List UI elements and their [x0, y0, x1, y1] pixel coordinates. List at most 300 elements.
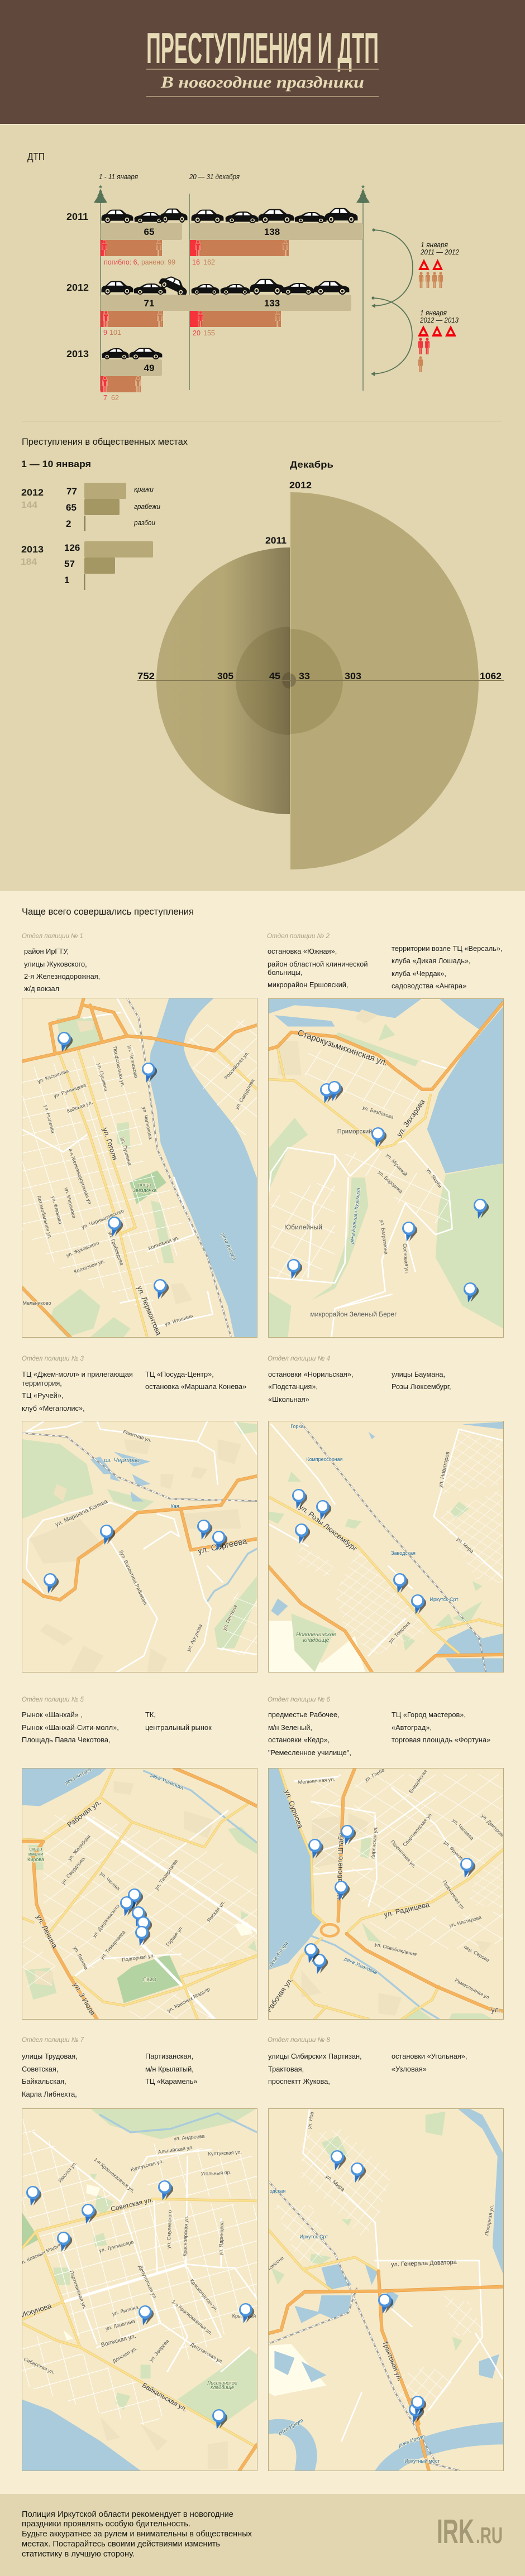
dept 8 places, column 2: «Узловая» — [392, 2065, 427, 2073]
totals 2012: 2012 — [21, 487, 44, 498]
map 4 labels: ул. Мира — [456, 1536, 475, 1554]
dept 8 places, column 1: улицы Сибирских Партизан, — [268, 2052, 362, 2060]
accident counts: 133 — [264, 298, 280, 309]
accident counts: 138 — [264, 227, 280, 237]
arrow: 2011 to 2012 — [371, 228, 413, 308]
axis values: 45 — [269, 671, 280, 681]
map 7 labels: ул. Красных Мадьяр — [18, 2241, 64, 2266]
map 5 labels: ул. Тимирязева — [154, 1858, 179, 1891]
map 3 border — [22, 1421, 257, 1672]
map 6 — [265, 1767, 506, 2019]
dept 2 places, column 2 — [392, 944, 503, 990]
map 1 labels: Кайская ул. — [66, 1099, 93, 1114]
map 1 labels: ул. Пушкина — [120, 1137, 132, 1166]
panel: police dept 2 — [267, 932, 504, 1337]
dept 6 places, column 1: предместье Рабочее, — [268, 1710, 340, 1719]
period heading: 1 — 10 января — [21, 459, 91, 469]
panel: police dept 5 — [22, 1695, 257, 2019]
values 2012: 77 — [66, 486, 77, 497]
map 4 labels: Иркутск-Срт — [430, 1597, 458, 1602]
dept 4 places, column 2: улицы Баумана, — [392, 1370, 445, 1378]
map 8 labels: река Иркут — [277, 2417, 304, 2436]
map 2 labels: река Большая Кузьмиха — [349, 1188, 361, 1244]
dept 6 places, column 2 — [392, 1710, 490, 1744]
heading: Декабрь: Декабрь — [290, 459, 333, 470]
dept 7 places, column 2: Партизанская, — [145, 2052, 193, 2060]
map 7 labels: Байкальская ул. — [141, 2381, 189, 2413]
map 1 labels: ул. Касьянова — [37, 1068, 69, 1084]
person icons on bars — [102, 240, 288, 392]
map 6 border — [268, 1768, 504, 2019]
axis values: 305 — [217, 671, 233, 681]
map 5 labels: ул. Дзержинского — [91, 1903, 121, 1939]
dept 3 places, column 1: ТЦ «Ручей», — [22, 1391, 64, 1400]
totals 2012: 144 — [21, 499, 38, 510]
map 5 labels: ул. 3 Июля — [71, 1981, 97, 2017]
map 1 labels: Колхозная ул. — [73, 1258, 106, 1275]
map 8 labels — [266, 2111, 495, 2464]
dept 2 places, column 2: садоводства «Ангара» — [392, 982, 466, 990]
crime type labels: разбои — [133, 519, 155, 527]
year labels: 2011 — [66, 211, 88, 222]
totals 2013 — [21, 544, 44, 567]
map 7 labels: Советская ул. — [110, 2196, 154, 2213]
dept 1 places: ж/д вокзал — [24, 984, 59, 993]
dept 2 places, column 1: больницы, — [268, 968, 303, 977]
road accident chart — [66, 173, 459, 402]
map 7 labels: Крылатый — [232, 2313, 256, 2319]
map 1 labels: Профсоюзная ул. — [112, 1046, 126, 1088]
map 5 — [22, 1766, 257, 2019]
dept 6 places, column 2: ТЦ «Город мастеров», — [392, 1710, 466, 1719]
map 7 labels: Красноярская ул. — [182, 2215, 189, 2256]
dept 7 heading: Отдел полиции № 7 — [22, 2036, 84, 2044]
dept 2 places, column 1: остановка «Южная», — [268, 947, 337, 955]
crime type labels — [133, 486, 160, 527]
map 6 labels: река Ангара — [268, 1940, 289, 1968]
values 2013 — [64, 542, 80, 585]
dept 3 places, column 1: ТЦ «Джем-молл» и прилегающая — [22, 1370, 133, 1378]
accident counts — [144, 227, 280, 373]
bars 2013 — [84, 541, 153, 590]
map 6 labels: ул. Фрунзе — [443, 1839, 465, 1861]
map 8 labels: ул. Генерала Доватора — [391, 2259, 457, 2268]
dept 4 places, column 1: «Подстанция», — [268, 1382, 318, 1391]
dept 8 places, column 1 — [268, 2052, 362, 2085]
dept 5 places, column 1: Рынок «Шанхай» , — [22, 1710, 83, 1719]
cars 2011 — [102, 208, 357, 223]
timeline axes — [101, 194, 363, 391]
map 3 labels: ул. Аргунова — [186, 1623, 203, 1652]
map 6 labels: ул. Чапаева — [451, 1818, 475, 1841]
map 5 labels: река Ангара — [64, 1766, 92, 1786]
map 2 labels: Приморский — [337, 1128, 372, 1135]
map 2 labels: ул. Захарова — [395, 1097, 427, 1138]
dept 6 places, column 2: «Автоград», — [392, 1723, 432, 1732]
map 2 labels: ул. Багратиона — [379, 1219, 389, 1255]
left half 2011 — [156, 547, 290, 814]
header band — [0, 0, 525, 125]
cars 2013 — [102, 348, 162, 359]
dept 6 heading: Отдел полиции № 6 — [268, 1695, 330, 1703]
map 7 labels: Донская ул. — [112, 2346, 138, 2364]
map 5 labels: Рабочая ул. — [65, 1798, 102, 1829]
dept 3 places, column 2: ТЦ «Посуда-Центр», — [145, 1370, 214, 1378]
map 7 labels: 1-я Красноказачья ул. — [171, 2299, 213, 2336]
totals 2013: 184 — [21, 556, 37, 567]
dept 4 places, column 2 — [392, 1370, 451, 1391]
panel: police dept 3 — [22, 1354, 257, 1672]
icon: right fir tree — [356, 185, 370, 203]
side note 2012-2013: 2012 — 2013 — [419, 316, 459, 324]
map 7 labels: Култукская ул. — [208, 2149, 242, 2157]
dept 3 places, column 1: территория, — [22, 1379, 62, 1387]
footer text — [22, 2510, 252, 2559]
accident counts: 71 — [144, 298, 154, 309]
map 1 — [22, 998, 257, 1337]
map 7 — [18, 2108, 258, 2471]
map 6 labels: ул. Освобождения — [374, 1941, 417, 1957]
dept 6 places, column 1: "Ремесленное училище", — [268, 1748, 351, 1757]
map 5 labels: имени — [28, 1851, 43, 1857]
accident count bars — [101, 223, 363, 376]
side note 2012-2013 — [418, 309, 459, 372]
subtitle rule — [146, 96, 379, 97]
map 6 labels: ул. Рабочего Штаба — [335, 1832, 345, 1899]
totals 2012 — [21, 487, 44, 510]
map 7 labels: Сибирская ул. — [23, 2356, 55, 2375]
map 6 labels: ул. Нестерова — [448, 1915, 482, 1929]
panel: police dept 8 — [266, 2036, 504, 2471]
dept 4 places, column 1 — [268, 1370, 354, 1404]
year labels: 2011 — [265, 535, 287, 546]
axis values: 33 — [299, 671, 310, 681]
map 7 labels: 1-я Красноказачья ул. — [93, 2156, 136, 2194]
heading: ДТП: ДТП — [27, 151, 45, 162]
map 8 labels: ул. Нов — [306, 2111, 315, 2130]
dept 3 places, column 1 — [22, 1370, 133, 1412]
map 4 labels: кладбище — [303, 1637, 330, 1643]
map 3 labels: ул. Маршала Конева — [54, 1498, 108, 1528]
map 6 labels: ул. Сурнова — [283, 1789, 305, 1830]
map 1 labels: ул. Свердлова — [234, 1078, 256, 1110]
crime type labels: кражи — [134, 486, 154, 493]
casualty numbers: 16 — [192, 258, 200, 266]
map 7 labels: ул. Лытюна — [112, 2304, 139, 2317]
dept 1 places: улицы Жуковского, — [24, 960, 87, 968]
map 6 labels: ул. — [491, 2006, 501, 2014]
dept 2 places, column 2: территории возле ТЦ «Версаль», — [392, 944, 503, 953]
map 8 labels: Трактовая ул. — [381, 2340, 404, 2382]
year labels — [265, 480, 312, 546]
map 7 labels: ул. Ядринцева — [218, 2221, 225, 2256]
map 4 pins — [292, 1489, 426, 1614]
dept 2 places, column 2: клуба «Чердак», — [392, 969, 446, 978]
values 2013: 126 — [64, 542, 80, 553]
map 8 pins — [331, 2150, 426, 2423]
dept 7 places, column 1: улицы Трудовая, — [22, 2052, 78, 2060]
map 4 labels: Компрессорная — [306, 1457, 343, 1462]
map 4 labels: ул. Томсона — [388, 1621, 411, 1644]
casualty numbers: 20 — [193, 329, 201, 337]
footer text: статистику в лучшую сторону. — [22, 2550, 135, 2559]
map 5 labels: Горная ул. — [165, 1925, 184, 1947]
casualty numbers: 101 — [109, 329, 121, 337]
axis values — [137, 671, 502, 681]
map 6 labels: река Ушаковка — [343, 1955, 378, 1976]
axis values: 752 — [137, 671, 155, 681]
year labels: 2012 — [66, 282, 89, 293]
dept 7 places, column 1: Байкальская, — [22, 2077, 66, 2085]
dept 7 places, column 2 — [145, 2052, 198, 2085]
map 6 labels: Пшеничная ул. — [441, 1880, 466, 1911]
map 1 labels — [22, 1045, 256, 1337]
map 1 labels: ул. Гоголя — [101, 1127, 120, 1161]
dept 3 places, column 2: остановка «Маршала Конева» — [145, 1382, 246, 1391]
map 6 labels — [265, 1767, 506, 2014]
map 6 labels: ул. Радищева — [383, 1900, 431, 1919]
panel: police dept 7 — [18, 2036, 258, 2471]
map 5 labels: сквер — [29, 1846, 42, 1852]
map 6 labels: Енисейская — [408, 1768, 428, 1794]
map 8 labels: Полярная ул. — [484, 2204, 495, 2236]
subtitle: В новогодние праздники — [160, 73, 364, 92]
accident counts: 49 — [144, 363, 154, 373]
map 1 labels: ул. Челнокова — [127, 1045, 139, 1078]
map 4 border — [268, 1421, 504, 1672]
values 2012: 65 — [66, 502, 77, 513]
map 1 labels: Мельниково — [23, 1300, 51, 1306]
dept 7 places, column 2: м/н Крылатый, — [145, 2065, 194, 2073]
panel: police dept 1 — [22, 932, 257, 1337]
semicircle chart: december — [137, 459, 504, 869]
values 2013: 57 — [64, 559, 75, 569]
map 5 labels: ул. Тимирязева — [99, 1929, 126, 1960]
map 5 labels: Кирова — [27, 1857, 44, 1862]
map 3 labels: ул. Сергеева — [197, 1536, 248, 1556]
map 2 labels: ул. Бородина — [377, 1169, 404, 1194]
map 4 labels: ул. Новаторов — [437, 1451, 451, 1488]
dept 8 heading: Отдел полиции № 8 — [268, 2036, 330, 2044]
casualty numbers: 7 — [103, 394, 107, 402]
panel: police dept 4 — [268, 1354, 504, 1672]
map 6 labels: ул. Дмитрова — [480, 1813, 506, 1839]
values 2012 — [66, 486, 77, 529]
dept 7 places, column 1: Советская, — [22, 2065, 58, 2073]
footer text: Полиция Иркутской области рекомендует в новогодние — [22, 2510, 233, 2519]
map 7 labels: ул. Трилиссера — [98, 2239, 134, 2253]
map 2 — [268, 998, 504, 1337]
period labels — [99, 173, 240, 181]
map 5 labels: ПКиО — [143, 1977, 156, 1982]
map 7 labels: Партизанская ул. — [69, 2270, 88, 2310]
logo: .RU — [476, 2522, 503, 2548]
map 7 labels: ул. Зверева — [148, 2338, 170, 2363]
crime type labels: грабежи — [134, 503, 160, 511]
year labels — [66, 211, 89, 359]
map 7 labels: кладбище — [211, 2385, 234, 2390]
dept 7 places, column 1: Карла Либнехта, — [22, 2090, 77, 2098]
dept 4 places, column 2: Розы Люксембург, — [392, 1382, 451, 1391]
axis values: 303 — [345, 671, 361, 681]
map 8 labels: Иркутск-Срт — [300, 2234, 328, 2239]
map 5 border — [22, 1768, 257, 2019]
cars 2012 — [102, 273, 349, 298]
map 2 border — [268, 999, 504, 1337]
map 5 labels: Ямская ул. — [206, 1900, 226, 1923]
map 7 labels: Волжская ул. — [101, 2333, 137, 2348]
dept 3 heading: Отдел полиции № 3 — [22, 1354, 84, 1362]
map 5 labels: ул. Желябова — [66, 1834, 92, 1862]
dept 5 places, column 2: центральный рынок — [145, 1723, 212, 1732]
casualty numbers: ранено: 99 — [141, 258, 175, 266]
dept 5 places, column 1: Площадь Павла Чекотова, — [22, 1736, 111, 1744]
dept 4 places, column 1: остановки «Норильская», — [268, 1370, 354, 1378]
map 3 labels: Кая — [170, 1503, 179, 1509]
heading: public crimes: Преступления в общественных местах — [22, 437, 188, 447]
logo: IRK — [437, 2512, 474, 2550]
map 8 — [266, 2108, 504, 2471]
map 6 labels: Спартаковская ул. — [402, 1811, 433, 1848]
dept 6 places, column 1 — [268, 1710, 351, 1757]
map 7 pins — [26, 2180, 254, 2429]
footer text: праздники проявлять особую бдительность. — [22, 2520, 190, 2529]
map 2 labels: Сосновая ул. — [402, 1243, 410, 1275]
map 3 labels: оз. Чертово — [104, 1457, 140, 1464]
values 2012: 2 — [66, 518, 71, 529]
side note 2011-2012: 1 января — [421, 241, 448, 249]
map 6 labels: пер. Серова — [463, 1944, 490, 1963]
casualty numbers: 155 — [203, 329, 215, 337]
map 3 pins — [44, 1520, 227, 1593]
map 1 labels: ул. Румянцева — [53, 1082, 87, 1099]
map 4 — [268, 1421, 504, 1672]
dept 1 places: 2-я Железнодорожная, — [24, 972, 100, 981]
dept 1 places: район ИрГТУ, — [24, 947, 69, 955]
map 6 labels: Мельничная ул. — [298, 1776, 335, 1785]
map 8 border — [268, 2108, 504, 2471]
map 7 labels: Угольный пр. — [201, 2170, 231, 2176]
casualty numbers: погибло: 6, — [104, 258, 139, 266]
map 1 labels: ул. Лермонтова — [136, 1285, 163, 1337]
values 2013: 1 — [64, 575, 69, 585]
icon: left fir tree — [94, 185, 107, 203]
map 7 labels: Депутатская ул. — [137, 2265, 158, 2300]
dept 3 places, column 1: клуб «Мегаполис», — [22, 1404, 85, 1412]
map 7 labels — [18, 2133, 256, 2413]
dept 6 places, column 2: торговая площадь «Фортуна» — [392, 1736, 490, 1744]
map 5 labels: ул. Лапина — [73, 1945, 89, 1971]
map 4 labels: Горка — [290, 1424, 304, 1429]
map 3 labels: ул. Пестеля — [221, 1604, 238, 1631]
map 1 labels: Российская ул. — [223, 1050, 250, 1080]
map 7 labels: Красноярская ул. — [189, 2278, 219, 2313]
map 6 labels: Рабочая ул. — [265, 1976, 294, 2013]
map 5 pins — [120, 1888, 152, 1946]
year labels: 2012 — [289, 480, 312, 491]
axis values: 1062 — [480, 671, 502, 681]
dept 4 places, column 1: «Школьная» — [268, 1395, 309, 1404]
dept 2 places, column 1: микрорайон Ершовский, — [268, 981, 348, 989]
dept 2 places, column 1: район областной клинической — [268, 960, 367, 968]
dept 6 places, column 1: остановки «Кедр», — [268, 1736, 330, 1744]
axis line — [137, 680, 504, 681]
map 1 labels: ул. Итошина — [164, 1313, 193, 1327]
dept 8 places, column 1: проспектт Жукова, — [268, 2077, 330, 2085]
map 3 labels: бул. Валентина Рябикова — [118, 1549, 149, 1606]
dept 2 places, column 2: клуба «Дикая Лошадь», — [392, 957, 471, 965]
side note 2012-2013: 1 января — [420, 309, 447, 317]
casualty numbers: 9 — [103, 329, 107, 337]
map 7 labels: ул. Лопатина — [105, 2318, 136, 2332]
dept 7 places, column 1 — [22, 2052, 78, 2098]
map 7 border — [22, 2108, 257, 2471]
footer text: Будьте аккуратнее за рулем и внимательны в общественных — [22, 2530, 252, 2539]
map 1 labels: ул. Миронова — [64, 1187, 77, 1219]
title rule — [146, 69, 379, 70]
map 1 labels: Звездочка — [133, 1188, 156, 1193]
map 1 labels: ул. Рылеева — [43, 1104, 56, 1134]
light section background — [0, 891, 525, 2494]
map 7 labels: Искунова — [20, 2301, 53, 2319]
dept 8 places, column 2: остановки «Угольная», — [392, 2052, 467, 2060]
dept 5 places, column 1 — [22, 1710, 119, 1744]
year labels: 2013 — [66, 348, 89, 359]
dept 3 places, column 2 — [145, 1370, 246, 1391]
dept 2 places, column 1 — [268, 947, 367, 989]
dept 1 heading: Отдел полиции № 1 — [22, 932, 83, 940]
map 2 pins — [287, 1081, 489, 1303]
casualty bars — [101, 240, 289, 392]
footer — [0, 2494, 525, 2576]
map 5 labels: река Ушаковка — [149, 1772, 184, 1791]
map 7 labels: ул. Андреева — [174, 2133, 205, 2141]
map 1 labels: роща — [139, 1182, 151, 1188]
map 7 labels: Култукская ул. — [130, 2158, 164, 2173]
map 2 labels: Юбилейный — [284, 1223, 322, 1231]
map 4 labels: Заводская — [391, 1550, 416, 1556]
map 2 labels: ул. Мухиной — [385, 1152, 408, 1177]
dept 2 heading: Отдел полиции № 2 — [267, 932, 330, 940]
map 8 labels: река Иркут — [397, 2433, 426, 2448]
period labels: 20 — 31 декабря — [189, 173, 240, 181]
dept 4 heading: Отдел полиции № 4 — [268, 1354, 330, 1362]
january crime bars — [21, 459, 160, 590]
map 5 labels: ул. Ленина — [35, 1913, 59, 1950]
dept 5 places, column 2: ТК, — [145, 1710, 156, 1719]
dept 8 places, column 2 — [392, 2052, 467, 2073]
map 7 labels: Ямская ул. — [57, 2160, 78, 2184]
map 2 labels: микрорайон Зеленый Берег — [311, 1310, 397, 1318]
map 8 labels: Иркутный мост — [405, 2458, 440, 2464]
dept 1 places — [24, 947, 100, 993]
map 2 labels: ул. Якоби — [426, 1167, 443, 1189]
map 1 labels: Автомобильная ул. — [36, 1195, 53, 1239]
map 1 labels: ул. Челнокова — [141, 1106, 154, 1140]
dept 6 places, column 1: м/н Зеленый, — [268, 1723, 312, 1732]
map 6 labels: Киренская ул. — [370, 1826, 379, 1859]
map 6 labels: Ремесленная ул. — [454, 1977, 491, 2001]
map 6 labels: Пшеничная ул. — [390, 1839, 417, 1869]
accident counts: 65 — [144, 227, 154, 237]
arrow: 2012 to 2013 — [371, 296, 412, 376]
side note 2011-2012: 2011 — 2012 — [420, 248, 459, 256]
side note 2011-2012 — [418, 241, 459, 288]
dept 7 places, column 2: ТЦ «Карамель» — [145, 2077, 198, 2085]
totals 2013: 2013 — [21, 544, 44, 555]
map 8 labels: одская — [270, 2188, 285, 2194]
map 4 labels — [280, 1424, 475, 2420]
